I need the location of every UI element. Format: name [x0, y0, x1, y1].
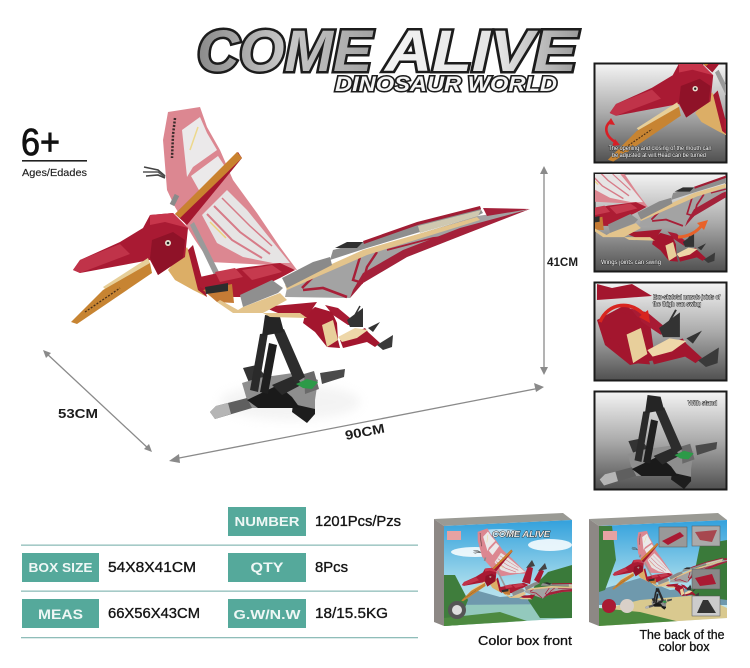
- color box front: COME ALIVE: [492, 529, 550, 539]
- width dimension arrow: [169, 383, 544, 463]
- color box back: [589, 513, 736, 628]
- spec: number: [228, 507, 401, 536]
- spec: meas: [22, 599, 200, 628]
- panel: thigh joints detail: [594, 282, 726, 380]
- caption: back of the color box: color box: [658, 640, 710, 654]
- panel: stand detail: [594, 392, 726, 490]
- spec: number: 1201Pcs/Pzs: [315, 514, 401, 530]
- caption: color box front: Color box front: [478, 633, 572, 648]
- title: Come Alive Dinosaur World logo: [197, 19, 580, 96]
- panel: wing joints detail: [594, 172, 728, 272]
- caption: back of the color box: The back of the: [640, 628, 725, 642]
- panel: mouth detail: The opening and closing of the mouth can: [608, 145, 712, 152]
- spec table: [21, 507, 418, 638]
- spec: gross and net weight: [228, 599, 388, 628]
- spec: box size: BOX SIZE: [28, 561, 92, 575]
- panel: thigh joints detail: Exo-skeletal muscle joints of: [653, 294, 720, 301]
- main product: pterosaur brick model on stand: [71, 107, 530, 423]
- spec: qty: [228, 553, 348, 582]
- spec: meas: MEAS: [38, 606, 83, 622]
- spec: gross and net weight: 18/15.5KG: [315, 606, 388, 622]
- panel: thigh joints detail: the thigh can swing: [653, 301, 701, 308]
- spec: gross and net weight: G.W/N.W: [234, 607, 301, 622]
- width dimension arrow: 90CM: [344, 421, 386, 443]
- age badge: [21, 122, 87, 179]
- panel: stand detail: With stand: [688, 400, 717, 407]
- spec: box size: [22, 553, 196, 582]
- height dimension arrow: 41CM: [547, 255, 578, 269]
- panel: mouth detail: [594, 62, 728, 164]
- depth dimension arrow: 53CM: [58, 406, 98, 421]
- age badge: 6+: [21, 122, 60, 164]
- color box front: [434, 513, 572, 626]
- age badge: Ages/Edades: [22, 167, 87, 179]
- spec: meas: 66X56X43CM: [108, 606, 200, 622]
- height dimension arrow: [540, 166, 578, 375]
- spec: number: NUMBER: [234, 514, 300, 529]
- panel: wing joints detail: Wings joints can swing: [601, 259, 661, 266]
- spec: qty: 8Pcs: [315, 560, 348, 576]
- spec: box size: 54X8X41CM: [108, 560, 196, 576]
- panel: mouth detail: be adjusted at will.Head can be turned: [612, 152, 706, 159]
- title: Come Alive Dinosaur World logo: COME: [197, 19, 374, 84]
- title: Come Alive Dinosaur World logo: DINOSAUR WORLD: [335, 73, 557, 96]
- title: Come Alive Dinosaur World logo: ALIVE: [383, 19, 580, 84]
- caption: back of the color box: [640, 628, 725, 654]
- depth dimension arrow: [43, 350, 152, 452]
- spec: qty: QTY: [250, 559, 284, 575]
